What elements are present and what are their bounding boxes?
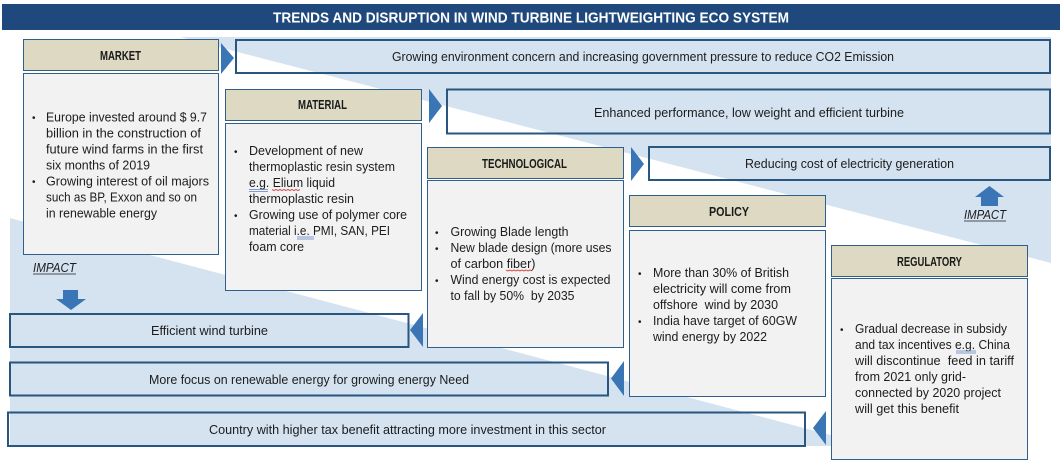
policy text: • <box>638 269 642 280</box>
arrow: market to outcome <box>221 43 234 74</box>
policy text: More than 30% of British <box>653 266 789 280</box>
panel: technological <box>428 148 624 348</box>
material text: • <box>234 147 238 158</box>
arrow: technological to outcome <box>631 147 644 181</box>
regulatory text: will discontinue feed in tariff <box>854 354 1015 368</box>
arrow: policy to renewable focus <box>611 361 624 396</box>
regulatory text: connected by 2020 project <box>855 386 1002 400</box>
outcome: efficient wind turbine: Efficient wind turbine <box>151 324 268 338</box>
material heading <box>226 90 422 120</box>
outcome: enhanced performance: Enhanced performance, low weight and efficient turbine <box>594 106 904 120</box>
material text: Growing use of polymer core <box>249 208 407 222</box>
material text: material i.e. PMI, SAN, PEI <box>249 224 390 238</box>
material text <box>226 124 422 290</box>
market text: billion in the construction of <box>46 126 202 140</box>
market heading <box>24 40 218 70</box>
market text: • <box>32 177 36 188</box>
regulatory text: from 2021 only grid- <box>855 370 966 384</box>
panel: policy <box>630 196 826 396</box>
market text: in renewable energy <box>46 206 158 220</box>
title banner: TRENDS AND DISRUPTION IN WIND TURBINE LIGHTWEIGHTING ECO SYSTEM <box>273 10 789 26</box>
outcome: reducing cost <box>649 147 1050 180</box>
outcome: tax benefit <box>8 412 805 446</box>
outcome: enhanced performance <box>447 90 1050 134</box>
technological text: • <box>435 244 439 255</box>
market text: Europe invested around $ 9.7 <box>46 110 207 124</box>
technological text: of carbon fiber) <box>450 257 536 271</box>
regulatory text: • <box>840 325 844 336</box>
icon: up arrow <box>975 186 1004 206</box>
market text: • <box>32 113 36 124</box>
policy text: India have target of 60GW <box>653 314 797 328</box>
material text: • <box>234 211 238 222</box>
panel: regulatory <box>832 246 1028 460</box>
material text: Development of new <box>249 144 364 158</box>
panel: market <box>24 40 218 254</box>
market text: Growing interest of oil majors <box>46 174 209 188</box>
regulatory text <box>832 278 1028 460</box>
technological heading <box>428 148 624 178</box>
market text: such as BP, Exxon and so on <box>46 190 197 204</box>
outcome: tax benefit: Country with higher tax benefit attracting more investment in this sector <box>209 423 606 437</box>
technological text: New blade design (more uses <box>450 241 612 255</box>
arrow: material to outcome <box>429 89 442 123</box>
technological text: Growing Blade length <box>450 225 569 239</box>
title banner <box>2 4 1060 30</box>
market text: six months of 2019 <box>46 158 150 172</box>
technological text: to fall by 50% by 2035 <box>450 289 575 303</box>
regulatory text: will get this benefit <box>854 402 960 416</box>
material heading: MATERIAL <box>298 98 347 112</box>
material text: thermoplastic resin system <box>249 160 395 174</box>
outcome: efficient wind turbine <box>10 314 408 347</box>
background: upper right triangle <box>180 37 1051 263</box>
material text: e.g. Elium liquid <box>249 176 335 190</box>
arrow: regulatory to tax benefit <box>813 411 826 445</box>
technological text: • <box>435 228 439 239</box>
technological text <box>428 180 624 348</box>
regulatory text: Gradual decrease in subsidy <box>855 322 1008 336</box>
regulatory text: and tax incentives e.g. China <box>855 338 1010 352</box>
material text: foam core <box>249 240 304 254</box>
impact label left: IMPACT <box>33 261 77 275</box>
outcome: environment concern: Growing environment concern and increasing government pressure to reduce CO2 Emission <box>392 50 894 64</box>
policy text: electricity will come from <box>653 282 791 296</box>
policy text: offshore wind by 2030 <box>653 298 778 312</box>
background: lower left triangle <box>10 218 872 446</box>
outcome: environment concern <box>236 40 1050 73</box>
policy heading <box>630 196 826 226</box>
market heading: MARKET <box>100 49 141 63</box>
policy text: • <box>638 317 642 328</box>
icon: down arrow <box>56 290 86 310</box>
technological heading: TECHNOLOGICAL <box>482 157 567 171</box>
outcome: reducing cost: Reducing cost of electricity generation <box>745 157 954 171</box>
market text <box>24 74 218 254</box>
policy heading: POLICY <box>709 205 750 219</box>
arrow: technological to efficient turbine <box>410 313 423 347</box>
impact label right: IMPACT <box>964 208 1007 222</box>
technological text: • <box>435 276 439 287</box>
market text: future wind farms in the first <box>46 142 204 156</box>
technological text: Wind energy cost is expected <box>450 273 611 287</box>
regulatory heading: REGULATORY <box>897 255 962 269</box>
policy text: wind energy by 2022 <box>652 330 767 344</box>
material text: thermoplastic resin <box>249 192 354 206</box>
outcome: renewable focus: More focus on renewable energy for growing energy Need <box>149 373 469 387</box>
outcome: renewable focus <box>10 362 608 396</box>
panel: material <box>226 90 422 290</box>
regulatory heading <box>832 246 1028 276</box>
policy text <box>630 230 826 396</box>
